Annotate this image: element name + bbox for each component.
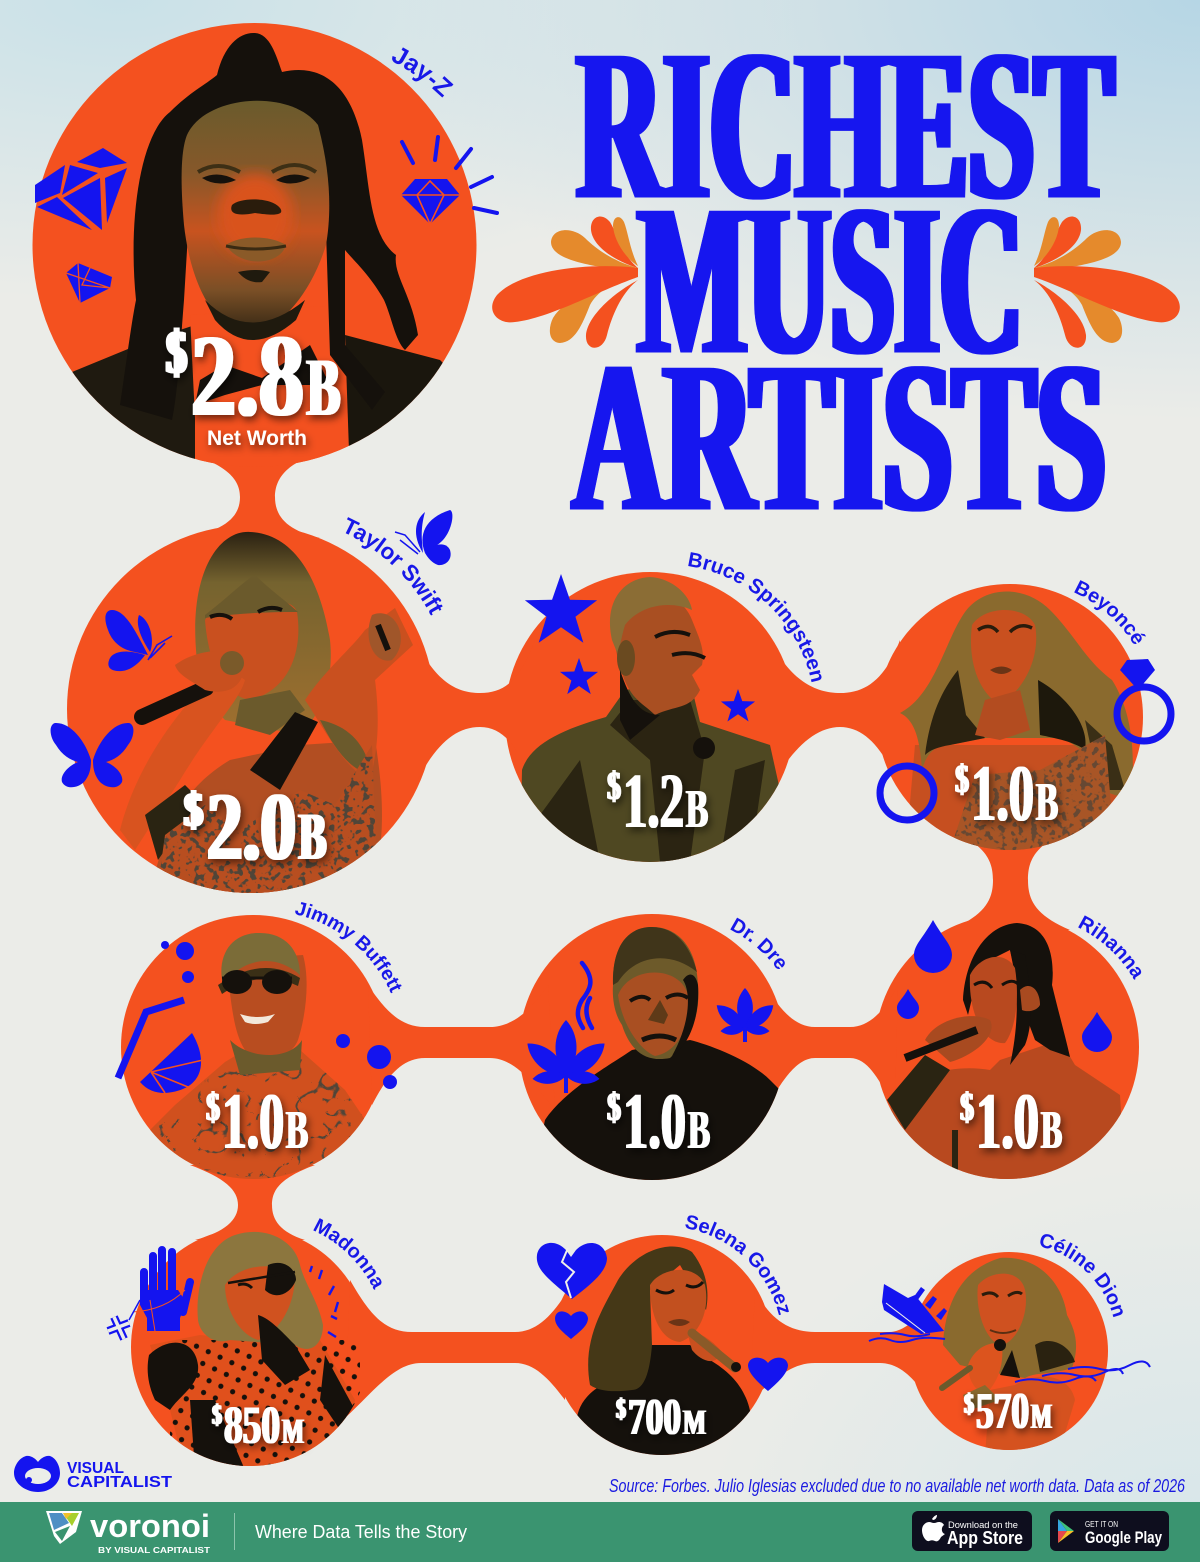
value: Céline Dion: 570 <box>976 1383 1029 1440</box>
portrait: Jimmy Buffett <box>150 933 375 1185</box>
portrait: Rihanna <box>887 923 1125 1190</box>
butterfly front <box>51 723 133 787</box>
sinking ship <box>882 1284 947 1334</box>
value: Bruce Springsteen: B <box>686 778 708 839</box>
title ornament: left petals <box>492 216 638 348</box>
value: Céline Dion: $ <box>964 1389 974 1420</box>
value: Taylor Swift: B <box>299 798 326 874</box>
title ornament: right petals <box>1034 216 1180 348</box>
portrait: Taylor Swift <box>120 532 413 895</box>
Visual Capitalist logo: CAPITALIST <box>67 1474 172 1491</box>
plain ring <box>880 766 934 820</box>
portrait: Jay-Z <box>72 33 443 464</box>
label: Bruce Springsteen: Bruce Springsteen <box>688 552 822 682</box>
large leaf <box>521 1020 611 1093</box>
hand <box>133 1250 190 1331</box>
rays <box>310 1266 338 1337</box>
butterfly top <box>395 510 452 565</box>
droplet large <box>914 920 952 973</box>
app store button: App Store <box>947 1528 1023 1548</box>
value: Jay-Z net worth: B <box>307 341 340 433</box>
logo text: VISUAL <box>67 1460 124 1477</box>
value: Dr. Dre: 1.0 <box>623 1078 686 1166</box>
value: Taylor Swift: $ <box>184 781 203 837</box>
value: Rihanna: B <box>1041 1099 1062 1160</box>
value: Rihanna: 1.0 <box>976 1078 1039 1166</box>
label: Rihanna: Rihanna <box>1078 915 1142 980</box>
small heart <box>555 1311 588 1339</box>
google play button <box>1050 1511 1169 1551</box>
value: Jimmy Buffett: $ <box>206 1084 220 1129</box>
value: Madonna: 850 <box>224 1395 280 1455</box>
value: Beyoncé: $ <box>955 756 969 801</box>
Visual Capitalist logo <box>14 1456 172 1492</box>
value: Madonna: M <box>282 1411 304 1451</box>
value: Beyoncé: 1.0 <box>971 750 1034 838</box>
label: Taylor Swift: Taylor Swift <box>346 517 443 616</box>
label: Céline Dion: Céline Dion <box>1040 1234 1123 1318</box>
butterfly left <box>105 610 172 671</box>
icons: Madonna hand and rosary <box>108 1250 338 1339</box>
value: Bruce Springsteen: 1.2 <box>623 757 684 844</box>
small diamond <box>66 263 112 303</box>
by visual capitalist: BY VISUAL CAPITALIST <box>98 1545 211 1555</box>
bubbles right <box>336 1034 397 1089</box>
small star right <box>721 689 755 722</box>
icons: Jimmy Buffett drink and bubbles <box>118 941 397 1093</box>
icons: Jay-Z diamonds <box>35 137 497 303</box>
footer bar <box>0 1502 1200 1562</box>
left waves <box>869 1333 945 1342</box>
portrait: Céline Dion <box>942 1258 1076 1455</box>
voronoi wordmark: voronoi <box>90 1508 210 1544</box>
small leaf <box>712 988 778 1042</box>
voronoi logo mark <box>46 1511 82 1544</box>
ring with diamond <box>1117 659 1171 741</box>
value: Selena Gomez: 700 <box>628 1389 681 1446</box>
title <box>573 5 1114 556</box>
bubbles left <box>161 941 194 983</box>
label: Beyoncé: Beyoncé <box>1074 580 1146 644</box>
label: Jay-Z: Jay-Z <box>392 47 454 98</box>
value: Jay-Z net worth: 2.8 <box>191 310 304 441</box>
portrait: Bruce Springsteen <box>520 577 780 862</box>
label: Jimmy Buffett: Jimmy Buffett <box>295 902 402 994</box>
net worth caption: Net Worth <box>207 427 307 450</box>
label: Madonna: Madonna <box>313 1218 382 1290</box>
value: Selena Gomez: $ <box>616 1394 626 1425</box>
app store button <box>912 1511 1032 1551</box>
sparkling diamond <box>401 137 497 224</box>
value: Rihanna: $ <box>960 1084 974 1129</box>
value: Beyoncé: B <box>1036 771 1058 832</box>
small star <box>560 658 598 694</box>
icons: Dr. Dre leaves and smoke <box>521 963 778 1093</box>
google play button: GET IT ON <box>1085 1520 1118 1529</box>
right waves <box>1015 1361 1150 1383</box>
portrait: Beyoncé <box>900 591 1135 860</box>
icons: droplets <box>897 920 1112 1052</box>
smoke <box>578 963 592 1028</box>
value: Selena Gomez: M <box>683 1402 706 1442</box>
portrait: Dr. Dre <box>530 927 780 1190</box>
large star <box>525 574 597 643</box>
label: Selena Gomez: Selena Gomez <box>685 1215 789 1316</box>
icons: stars <box>525 574 755 722</box>
value: Jimmy Buffett: 1.0 <box>222 1078 284 1166</box>
heart right <box>748 1358 788 1391</box>
value: Dr. Dre: $ <box>607 1084 621 1129</box>
portrait: Selena Gomez <box>576 1247 752 1460</box>
portrait: Madonna <box>148 1232 360 1470</box>
google play button: Google Play <box>1085 1528 1162 1547</box>
large diamond <box>35 148 127 230</box>
value: Jimmy Buffett: B <box>286 1099 308 1160</box>
value: Madonna: $ <box>212 1400 222 1431</box>
value: Jay-Z net worth: $ <box>166 319 187 387</box>
broken heart <box>537 1243 607 1299</box>
orange slice <box>140 1033 203 1093</box>
straw <box>118 1000 184 1078</box>
icons: Céline Dion ship and waves <box>869 1284 1150 1383</box>
app store button: Download on the <box>948 1520 1018 1530</box>
icons: butterflies <box>51 510 452 787</box>
droplet right <box>1082 1012 1112 1052</box>
icons: rings <box>880 659 1171 820</box>
logo mark <box>14 1456 60 1492</box>
droplet small <box>897 989 919 1019</box>
value: Dr. Dre: B <box>688 1099 710 1160</box>
icons: Selena Gomez hearts <box>537 1243 788 1391</box>
value: Taylor Swift: 2.0 <box>207 773 296 881</box>
value: Céline Dion: M <box>1031 1396 1052 1436</box>
tagline: Where Data Tells the Story <box>255 1522 467 1542</box>
cross <box>108 1300 140 1339</box>
value: Bruce Springsteen: $ <box>607 763 621 808</box>
label: Dr. Dre: Dr. Dre <box>730 918 785 969</box>
